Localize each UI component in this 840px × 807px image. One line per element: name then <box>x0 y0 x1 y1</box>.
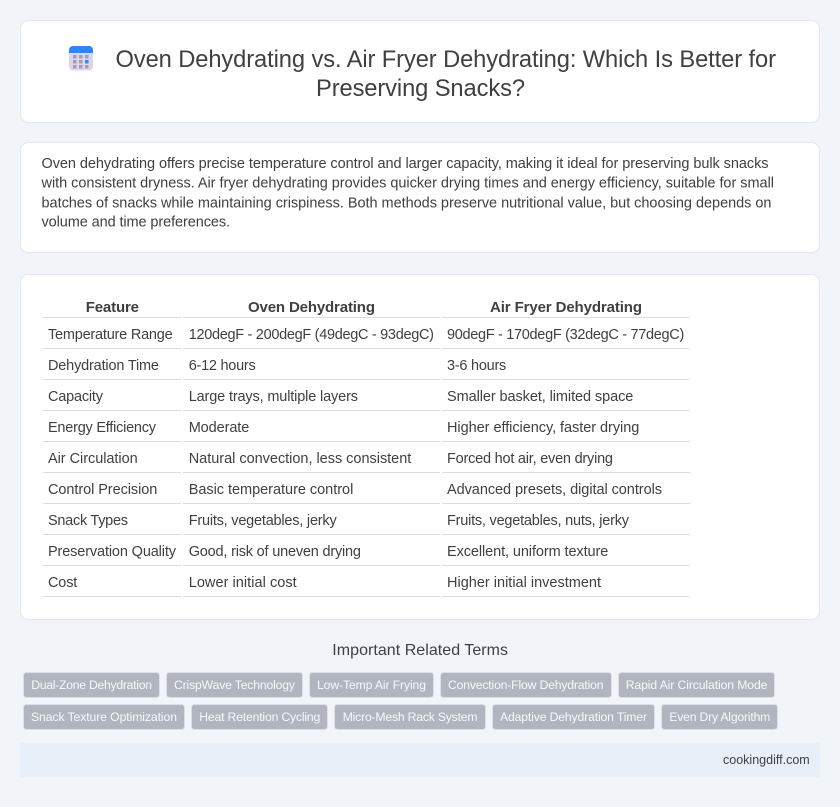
table row: dehydration time <box>43 358 690 380</box>
table row: control precision: Basic temperature control <box>189 482 353 498</box>
table row: control precision <box>43 482 690 504</box>
table row: air circulation: Forced hot air, even drying <box>447 451 613 467</box>
table row: preservation quality <box>43 544 690 566</box>
tag <box>618 672 774 698</box>
tag: CrispWave Technology <box>174 678 296 692</box>
table row: preservation quality: Excellent, uniform texture <box>447 544 608 560</box>
table row: snack types: Fruits, vegetables, jerky <box>189 513 337 529</box>
table row: snack types: Fruits, vegetables, nuts, jerky <box>447 513 630 529</box>
tag: Low-Temp Air Frying <box>317 678 426 692</box>
table row: capacity <box>43 389 690 411</box>
tag <box>492 704 654 730</box>
tag <box>662 704 778 730</box>
text block: summary paragraph: batches of snacks while maintaining crispiness. Both methods preserve nutritional value, but choosing depends on <box>42 195 772 211</box>
table row: capacity: Smaller basket, limited space <box>447 389 633 405</box>
table row: preservation quality: Preservation Quality <box>48 544 177 560</box>
table row: energy efficiency: Moderate <box>189 420 249 436</box>
tag: Dual-Zone Dehydration <box>31 678 152 692</box>
table row: capacity: Capacity <box>48 389 104 405</box>
tag list: related terms <box>24 672 778 730</box>
tag: Adaptive Dehydration Timer <box>500 710 647 724</box>
tag <box>334 704 486 730</box>
table row: cost <box>43 575 690 597</box>
heading: important related terms: Important Related Terms <box>332 642 508 659</box>
table row: snack types: Snack Types <box>48 513 128 529</box>
tag: Micro-Mesh Rack System <box>343 710 478 724</box>
panel: introduction <box>20 142 820 252</box>
title: Oven Dehydrating vs. Air Fryer Dehydrating: Which Is Better for <box>116 47 776 73</box>
table row: dehydration time: 3-6 hours <box>447 358 506 374</box>
text block: summary paragraph: volume and time preferences. <box>42 215 230 231</box>
table header: Air Fryer Dehydrating <box>490 299 642 316</box>
text block: summary paragraph <box>40 156 774 231</box>
icon: calendar grid <box>69 46 93 70</box>
tag <box>166 672 302 698</box>
text block: summary paragraph: with consistent dryness. Air fryer dehydrating provides quicker drying times and energy efficiency, suitable for small <box>40 176 774 192</box>
text block: summary paragraph: Oven dehydrating offers precise temperature control and larger capacity, making it ideal for preserving bulk snacks <box>42 156 768 172</box>
tag: Rapid Air Circulation Mode <box>626 678 768 692</box>
table row: air circulation: Air Circulation <box>48 451 138 467</box>
footer bar: cookingdiff.com <box>723 753 810 767</box>
tag <box>24 704 184 730</box>
tag <box>440 672 612 698</box>
table row: cost: Cost <box>48 575 77 591</box>
tag <box>192 704 328 730</box>
tag <box>310 672 434 698</box>
table row: energy efficiency: Energy Efficiency <box>48 420 157 436</box>
footer bar <box>20 743 820 777</box>
table row: control precision: Advanced presets, digital controls <box>447 482 662 498</box>
table row: air circulation <box>43 451 690 473</box>
table row: cost: Higher initial investment <box>447 575 601 591</box>
table row: temperature range <box>43 327 690 349</box>
panel: title card <box>20 20 820 122</box>
table row: temperature range: Temperature Range <box>48 327 173 343</box>
table header: Oven Dehydrating <box>248 299 375 316</box>
table row: energy efficiency: Higher efficiency, faster drying <box>447 420 639 436</box>
table row: energy efficiency <box>43 420 690 442</box>
table row: preservation quality: Good, risk of uneven drying <box>189 544 361 560</box>
table row: dehydration time: Dehydration Time <box>48 358 159 374</box>
table header <box>43 299 690 318</box>
table row: capacity: Large trays, multiple layers <box>189 389 358 405</box>
title <box>116 47 776 102</box>
table row: snack types <box>43 513 690 535</box>
tag: Snack Texture Optimization <box>31 710 177 724</box>
table row: cost: Lower initial cost <box>189 575 297 591</box>
tag <box>24 672 160 698</box>
tag: Even Dry Algorithm <box>669 710 770 724</box>
tag: Heat Retention Cycling <box>199 710 320 724</box>
table row: control precision: Control Precision <box>48 482 157 498</box>
title: Preserving Snacks? <box>316 76 525 102</box>
tag: Convection-Flow Dehydration <box>448 678 604 692</box>
panel: comparison table <box>20 274 820 620</box>
table header: Feature <box>86 299 139 316</box>
table row: temperature range: 90degF - 170degF (32degC - 77degC) <box>447 327 684 343</box>
table row: air circulation: Natural convection, less consistent <box>189 451 411 467</box>
table row: temperature range: 120degF - 200degF (49degC - 93degC) <box>189 327 434 343</box>
table row: dehydration time: 6-12 hours <box>189 358 256 374</box>
